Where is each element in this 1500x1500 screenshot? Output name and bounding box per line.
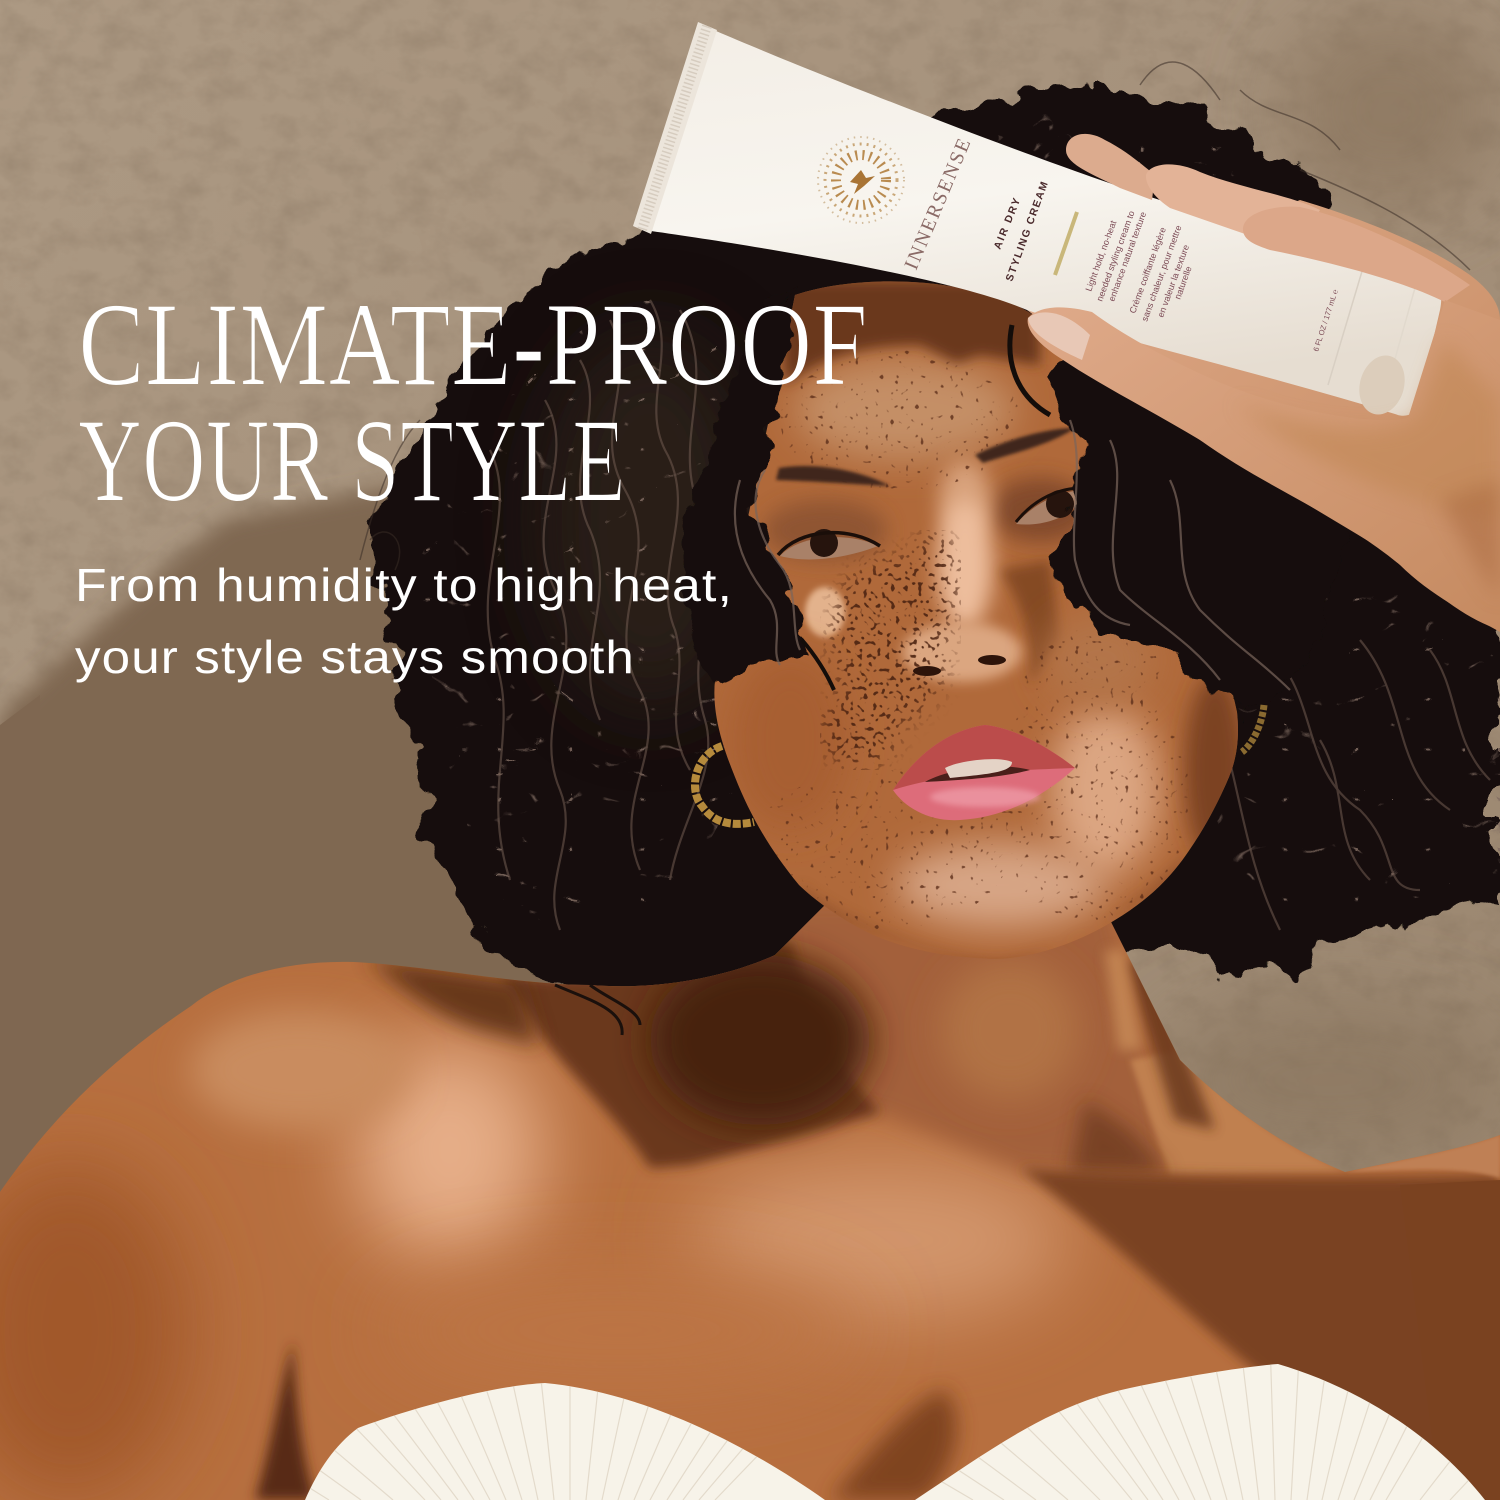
product description: 6 FL OZ / 177 mL ℮ — [1311, 288, 1340, 353]
right cheek light — [1050, 705, 1160, 875]
product description: Crème coiffante légère — [1127, 226, 1168, 315]
logo sunburst — [818, 137, 904, 223]
hair curls texture — [420, 114, 1500, 940]
nose bridge highlight — [939, 460, 991, 540]
eyes and brows — [776, 428, 1082, 559]
tube body — [651, 31, 1441, 416]
neck shadow lower V — [500, 940, 880, 1168]
tube cap seam — [1328, 268, 1363, 385]
chest highlight — [690, 1160, 1070, 1320]
subtitle — [75, 559, 733, 683]
freckles sparse — [750, 350, 1190, 930]
forehead shadow — [780, 280, 1040, 385]
nose — [902, 622, 1022, 682]
hair strands — [488, 300, 1490, 930]
dress — [0, 1340, 1500, 1500]
subtitle: your style stays smooth — [75, 631, 635, 683]
left cheek — [720, 668, 837, 829]
product description: needed styling cream to — [1094, 209, 1137, 303]
face — [700, 270, 1250, 975]
title: YOUR STYLE — [78, 395, 626, 526]
hand holding tube: back of hand — [1027, 200, 1500, 630]
gold bar — [1055, 212, 1077, 275]
chest shadow — [1021, 1164, 1500, 1447]
neck side light and stripes — [1130, 1050, 1345, 1175]
body and shoulders — [0, 900, 1500, 1500]
tube crimp — [633, 22, 717, 234]
eye sockets — [763, 500, 887, 560]
underarm shadow — [255, 1340, 315, 1500]
product tube — [633, 22, 1441, 420]
wall shadow — [0, 480, 620, 1200]
left arm shade — [0, 1160, 190, 1500]
title — [78, 279, 868, 526]
product description: Light hold, no-heat — [1083, 219, 1119, 293]
hand holding tube: fingers and thumb — [1028, 134, 1500, 632]
nose right shadow — [1000, 560, 1060, 685]
product name: AIR DRY — [992, 197, 1023, 251]
hair — [360, 62, 1500, 1010]
face curl highlights — [735, 420, 1290, 690]
subtitle: From humidity to high heat, — [75, 559, 733, 611]
product name: STYLING CREAM — [1004, 180, 1051, 283]
hair strands at neck — [555, 985, 640, 1035]
flyaway hairs — [360, 62, 1470, 570]
arm light strip — [1345, 1135, 1500, 1178]
curl tip — [802, 640, 834, 690]
product description: en valeur la texture — [1155, 243, 1191, 319]
cleavage shadow — [830, 1390, 957, 1500]
dress pleats — [0, 1340, 1500, 1500]
loop curl — [1010, 325, 1050, 415]
right face edge shadow — [1185, 675, 1245, 865]
lips — [893, 725, 1075, 820]
product description: sans chaleur, pour mettre — [1139, 224, 1184, 323]
freckles dense — [820, 530, 961, 770]
brand name: INNERSENSE — [900, 135, 975, 273]
neck — [780, 900, 1170, 1175]
earrings — [695, 705, 1264, 824]
chin edge shadow — [800, 855, 1190, 975]
product description — [1083, 209, 1340, 353]
product description: naturelle — [1172, 265, 1194, 301]
forehead light — [795, 360, 1015, 460]
hair over face — [686, 290, 1360, 715]
hair lighter zone — [540, 330, 760, 710]
neck shadow darkest — [650, 955, 870, 1125]
cheek highlight patch — [805, 587, 845, 637]
nostrils — [913, 655, 1006, 676]
shoulder highlight — [355, 1040, 545, 1260]
shoulder top shadow — [365, 958, 540, 1045]
product description: enhance natural texture — [1106, 210, 1148, 303]
title: CLIMATE-PROOF — [78, 279, 868, 410]
